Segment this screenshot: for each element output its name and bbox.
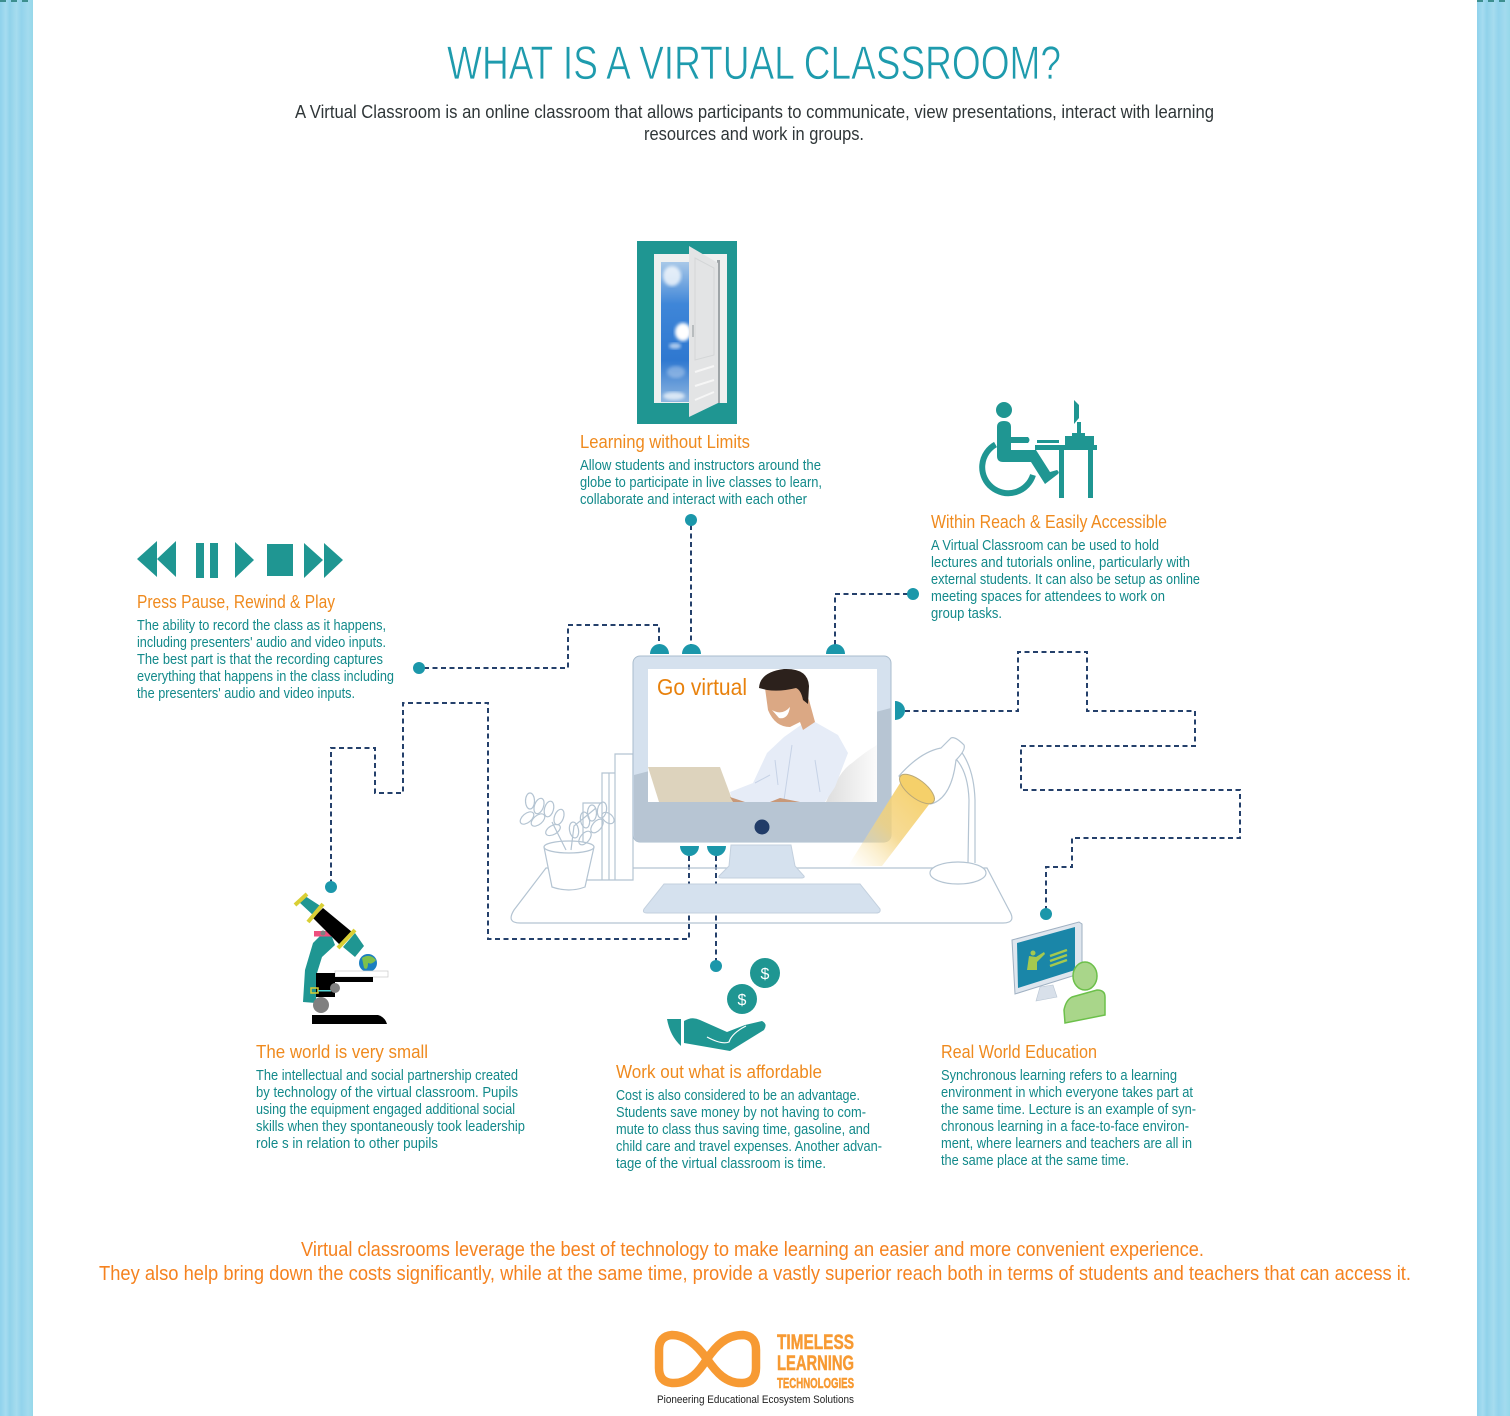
wheelchair at desk icon xyxy=(982,400,1097,498)
heading and text: press pause: The best part is that the recording captures xyxy=(137,652,383,668)
heading and text: press pause: including presenters' audio and video inputs. xyxy=(137,635,386,651)
heading and text: work out what is affordable: tage of the virtual classroom is time. xyxy=(616,1156,826,1172)
heading and text: within reach: lectures and tutorials online, particularly with xyxy=(931,555,1190,571)
heading and text: within reach: external students. It can also be setup as online xyxy=(931,572,1200,588)
heading and text: the world is very small: The world is very small xyxy=(256,1042,428,1062)
heading and text: real world education: environment in which everyone takes part at xyxy=(941,1085,1193,1101)
desk scene xyxy=(511,656,1012,923)
heading and text: the world is very small: using the equipment engaged additional social xyxy=(256,1102,515,1118)
logo: Pioneering Educational Ecosystem Solutions xyxy=(657,1394,854,1406)
heading and text: work out what is affordable: mute to class thus saving time, gasoline, and xyxy=(616,1122,870,1138)
media controls icon xyxy=(137,541,343,578)
heading and text: within reach: A Virtual Classroom can be used to hold xyxy=(931,538,1159,554)
monitor xyxy=(633,656,891,842)
logo: LEARNING xyxy=(777,1352,854,1375)
heading and text: within reach: Within Reach & Easily Accessible xyxy=(931,512,1167,532)
desk outline xyxy=(511,868,1012,923)
heading and text: within reach: meeting spaces for attendees to work on xyxy=(931,589,1165,605)
heading and text: press pause: The ability to record the class as it happens, xyxy=(137,618,386,634)
logo: TECHNOLOGIES xyxy=(777,1375,854,1392)
intro text xyxy=(295,102,1214,144)
potted plant xyxy=(518,793,616,890)
closing statement: Virtual classrooms leverage the best of technology to make learning an easier and more convenient experience. xyxy=(301,1239,1204,1261)
title: WHAT IS A VIRTUAL CLASSROOM? xyxy=(447,36,1061,89)
heading and text: work out what is affordable: Cost is also considered to be an advantage. xyxy=(616,1088,860,1104)
heading and text: within reach: group tasks. xyxy=(931,606,1002,622)
logo xyxy=(657,1331,854,1406)
heading and text: real world education: ment, where learners and teachers are all in xyxy=(941,1136,1192,1152)
intro text: resources and work in groups. xyxy=(644,124,864,144)
heading and text: real world education xyxy=(941,1042,1196,1169)
heading and text: the world is very small: role s in relation to other pupils xyxy=(256,1136,438,1152)
right curtain border xyxy=(1477,0,1510,1416)
heading and text: the world is very small: skills when they spontaneously took leadership xyxy=(256,1119,525,1135)
heading and text: the world is very small: The intellectual and social partnership created xyxy=(256,1068,518,1084)
heading and text: real world education: Real World Education xyxy=(941,1042,1097,1062)
closing statement xyxy=(99,1239,1411,1285)
heading and text: press pause: Press Pause, Rewind & Play xyxy=(137,592,335,612)
left curtain border xyxy=(0,0,33,1416)
hand with coins icon: $ xyxy=(761,966,770,983)
heading and text: press pause xyxy=(137,592,394,702)
intro text: A Virtual Classroom is an online classroom that allows participants to communicate, view presentations, interact with learning xyxy=(295,102,1214,122)
heading and text: the world is very small: by technology of the virtual classroom. Pupils xyxy=(256,1085,518,1101)
heading and text: learning without limits xyxy=(580,432,822,508)
heading and text: real world education: the same time. Lecture is an example of syn- xyxy=(941,1102,1196,1118)
heading and text: press pause: the presenters' audio and video inputs. xyxy=(137,686,355,702)
monitor stand xyxy=(719,845,804,878)
hand with coins icon: $ xyxy=(738,992,747,1009)
connector routes xyxy=(325,514,1240,972)
photo: man with laptop xyxy=(648,669,877,802)
keyboard xyxy=(643,884,880,913)
desk lamp xyxy=(848,738,986,884)
heading and text: press pause: everything that happens in the class including xyxy=(137,669,394,685)
heading and text: learning without limits: Learning without Limits xyxy=(580,432,750,452)
heading and text: within reach xyxy=(931,512,1200,622)
microscope icon xyxy=(295,894,388,1024)
go virtual label: Go virtual xyxy=(657,674,747,700)
logo: TIMELESS xyxy=(777,1331,854,1354)
heading and text: real world education: chronous learning in a face-to-face environ- xyxy=(941,1119,1189,1135)
heading and text: work out what is affordable xyxy=(616,1062,882,1172)
heading and text: learning without limits: globe to participate in live classes to learn, xyxy=(580,475,822,491)
heading and text: real world education: the same place at the same time. xyxy=(941,1153,1129,1169)
heading and text: learning without limits: Allow students and instructors around the xyxy=(580,458,821,474)
hand with coins icon xyxy=(667,958,780,1051)
heading and text: work out what is affordable: Work out what is affordable xyxy=(616,1062,822,1082)
door icon xyxy=(637,241,737,424)
heading and text: the world is very small xyxy=(256,1042,525,1152)
closing statement: They also help bring down the costs significantly, while at the same time, provide a vastly superior reach both in terms of students and teachers that can access it. xyxy=(99,1263,1411,1285)
heading and text: work out what is affordable: Students save money by not having to com- xyxy=(616,1105,866,1121)
heading and text: real world education: Synchronous learning refers to a learning xyxy=(941,1068,1177,1084)
heading and text: learning without limits: collaborate and interact with each other xyxy=(580,492,807,508)
monitor and learner icon xyxy=(1012,922,1105,1023)
heading and text: work out what is affordable: child care and travel expenses. Another advan- xyxy=(616,1139,882,1155)
books xyxy=(583,754,633,880)
